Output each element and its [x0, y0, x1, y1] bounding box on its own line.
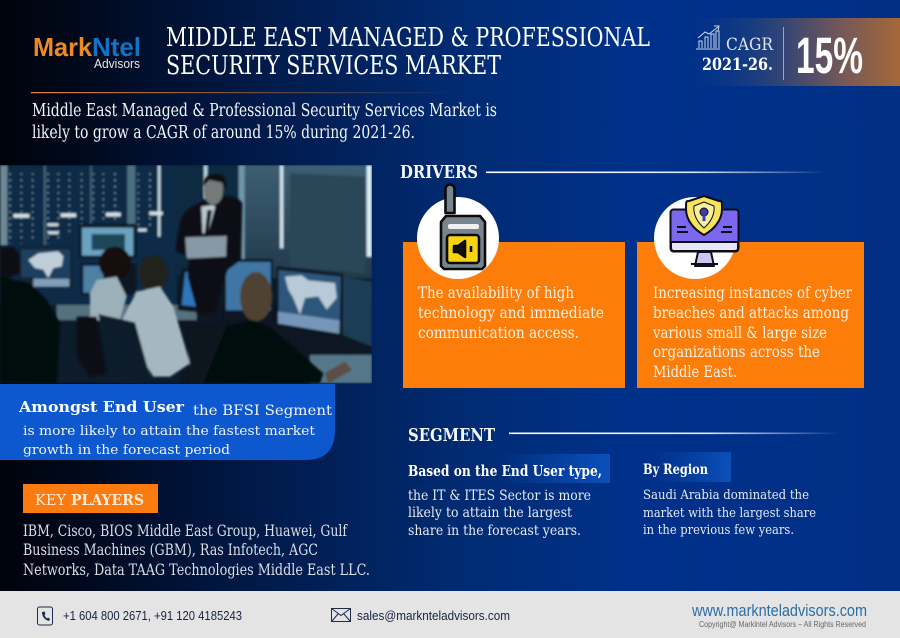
footer: Copyright@ Marklntel Advisors – All Rights Reserved	[699, 620, 866, 629]
title	[166, 23, 650, 81]
segment: region: By Region	[643, 462, 708, 478]
segment: end user: share in the forecast years.	[408, 523, 581, 539]
monitors	[20, 247, 72, 288]
CAGR badge	[690, 18, 900, 86]
panel: driver 2: Increasing instances of cyber	[653, 284, 853, 302]
segment: end user	[408, 454, 610, 539]
icon: phone	[38, 607, 52, 625]
footer: sales@marknteladvisors.com	[357, 609, 510, 623]
panel: driver 1	[403, 184, 625, 388]
photo: security operations centre	[0, 165, 372, 383]
callout: BFSI: is more likely to attain the fastest market	[23, 424, 316, 439]
key players label: KEY	[35, 491, 67, 509]
segment: end user: likely to attain the largest	[408, 505, 572, 521]
callout: BFSI: Amongst End User	[18, 398, 185, 416]
logo: Advisors	[94, 56, 140, 71]
panel: driver 2: organizations across the	[653, 343, 820, 361]
divider line	[31, 92, 461, 93]
intro text: likely to grow a CAGR of around 15% during 2021-26.	[32, 123, 415, 143]
footer: www.marknteladvisors.com	[691, 602, 867, 620]
icon: envelope	[332, 608, 350, 622]
heading: segment: SEGMENT	[408, 425, 495, 446]
panel: driver 1: technology and immediate	[418, 304, 604, 322]
CAGR badge: 2021-26.	[702, 55, 773, 75]
icon: growth chart	[696, 26, 720, 49]
segment: region: Saudi Arabia dominated the	[643, 488, 809, 503]
logo: Ntel	[92, 32, 141, 62]
segment: region	[643, 452, 816, 538]
icon: monitor with shield	[670, 196, 738, 266]
title: MIDDLE EAST MANAGED & PROFESSIONAL	[166, 23, 650, 53]
segment: region: market with the largest share	[643, 506, 816, 521]
title: SECURITY SERVICES MARKET	[166, 51, 502, 81]
key players list: Business Machines (GBM), Ras Infotech, AGC	[23, 541, 318, 559]
CAGR badge: 15%	[796, 27, 863, 84]
panel: driver 2: various small & large size	[652, 324, 827, 342]
key players list: IBM, Cisco, BIOS Middle East Group, Huawei, Gulf	[23, 522, 348, 540]
segment: end user: Based on the End User type,	[408, 463, 602, 480]
panel: driver 1: The availability of high	[418, 284, 574, 302]
people	[176, 195, 242, 313]
logo: Mark	[33, 32, 93, 62]
key players label: PLAYERS	[71, 491, 144, 509]
footer	[0, 591, 900, 638]
panel: driver 1: communication access.	[418, 324, 579, 342]
icon: walkie talkie	[441, 184, 485, 269]
key players list: Networks, Data TAAG Technologies Middle East LLC.	[23, 561, 370, 579]
key players label	[23, 484, 158, 513]
footer: +1 604 800 2671, +91 120 4185243	[63, 609, 242, 623]
segment: region: in the previous few years.	[643, 523, 794, 538]
key players list	[23, 522, 370, 579]
panel: driver 2: breaches and attacks among	[653, 304, 849, 322]
callout: BFSI: the BFSI Segment	[193, 403, 332, 419]
callout: BFSI: growth in the forecast period	[23, 443, 230, 458]
logo	[33, 32, 141, 71]
panel: driver 2	[637, 196, 864, 388]
intro text	[32, 101, 497, 143]
heading: drivers: DRIVERS	[400, 162, 478, 183]
segment: end user: the IT & ITES Sector is more	[408, 488, 591, 504]
CAGR badge: CAGR	[726, 35, 774, 55]
panel: driver 2: Middle East.	[653, 363, 737, 381]
intro text: Middle East Managed & Professional Security Services Market is	[32, 101, 497, 121]
callout: BFSI	[0, 384, 335, 460]
